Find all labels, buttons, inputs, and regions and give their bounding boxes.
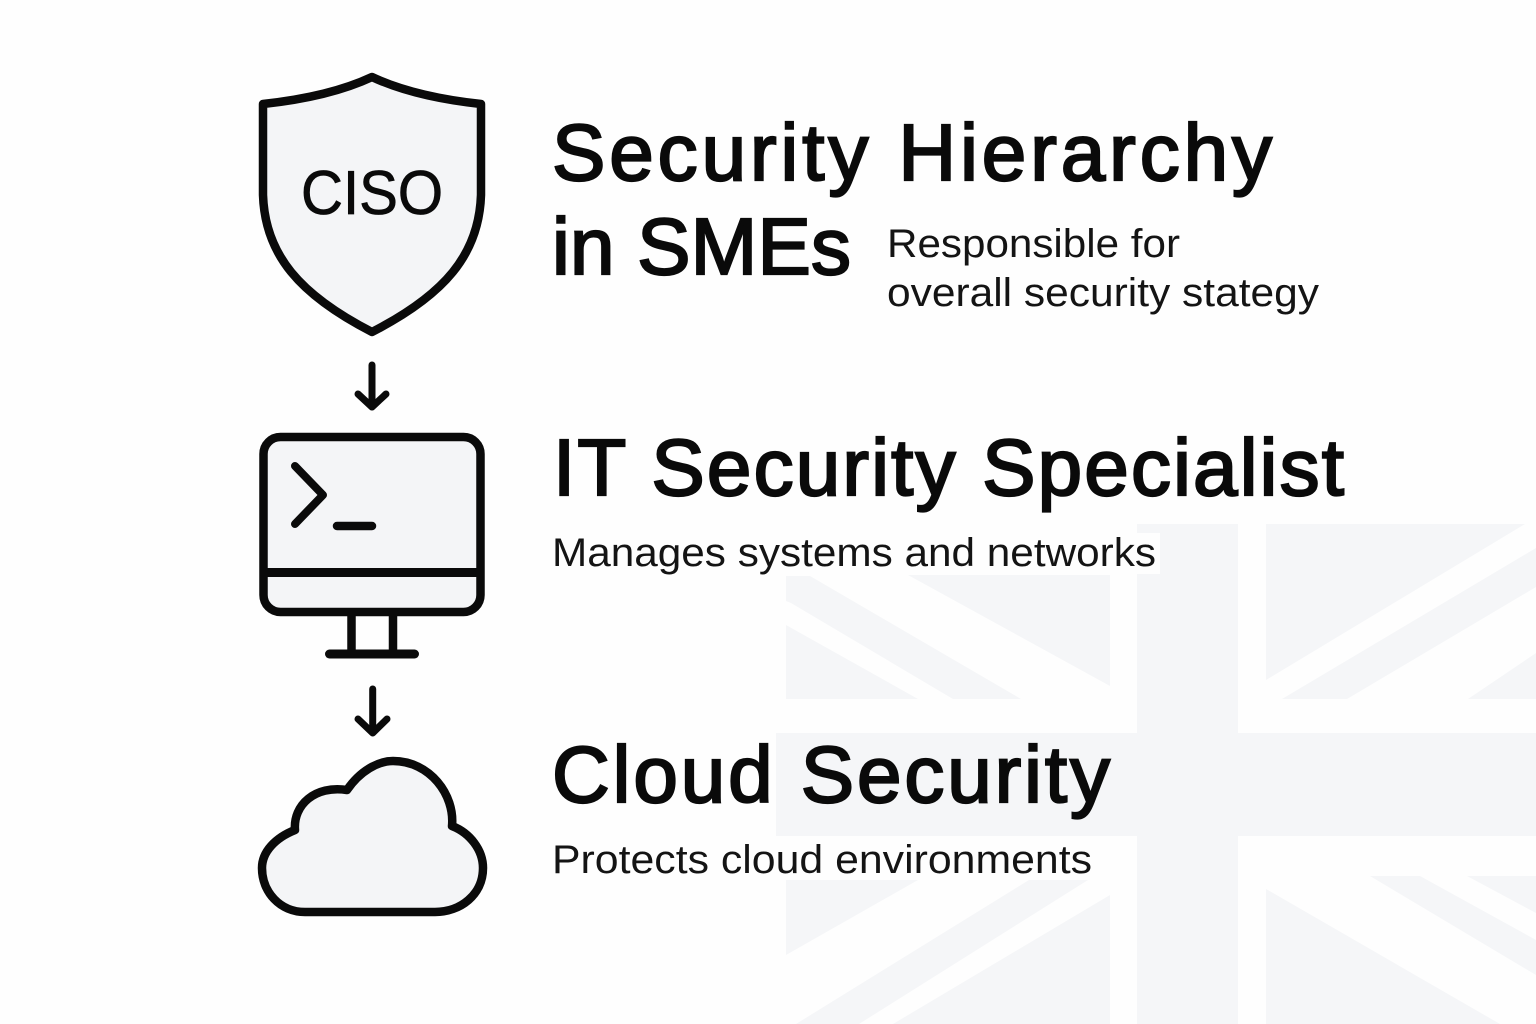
heading: IT Security Specialist: IT Security Specialist [553, 423, 1344, 512]
icon: cloud [262, 761, 483, 912]
icon: CISO shield: CISO [301, 159, 443, 228]
text: IT specialist description: Manages systems and networks [552, 531, 1156, 575]
icon: CISO shield [263, 77, 481, 332]
heading: Security Hierarchy in SMEs: Security Hierarchy [552, 108, 1272, 197]
background: Union Jack watermark [776, 524, 1536, 1024]
icon: terminal monitor [264, 437, 480, 654]
text: CISO description: Responsible for [887, 222, 1180, 266]
arrow: IT specialist to cloud security [358, 689, 387, 733]
heading: Security Hierarchy in SMEs: in SMEs [552, 202, 851, 291]
text: CISO description: overall security stategy [887, 271, 1319, 315]
text: cloud security description: Protects cloud environments [552, 838, 1092, 882]
heading: Security Hierarchy in SMEs [552, 108, 1272, 291]
heading: Cloud Security: Cloud Security [552, 730, 1110, 819]
text: CISO description [887, 222, 1319, 315]
arrow: CISO to IT specialist [358, 365, 386, 407]
